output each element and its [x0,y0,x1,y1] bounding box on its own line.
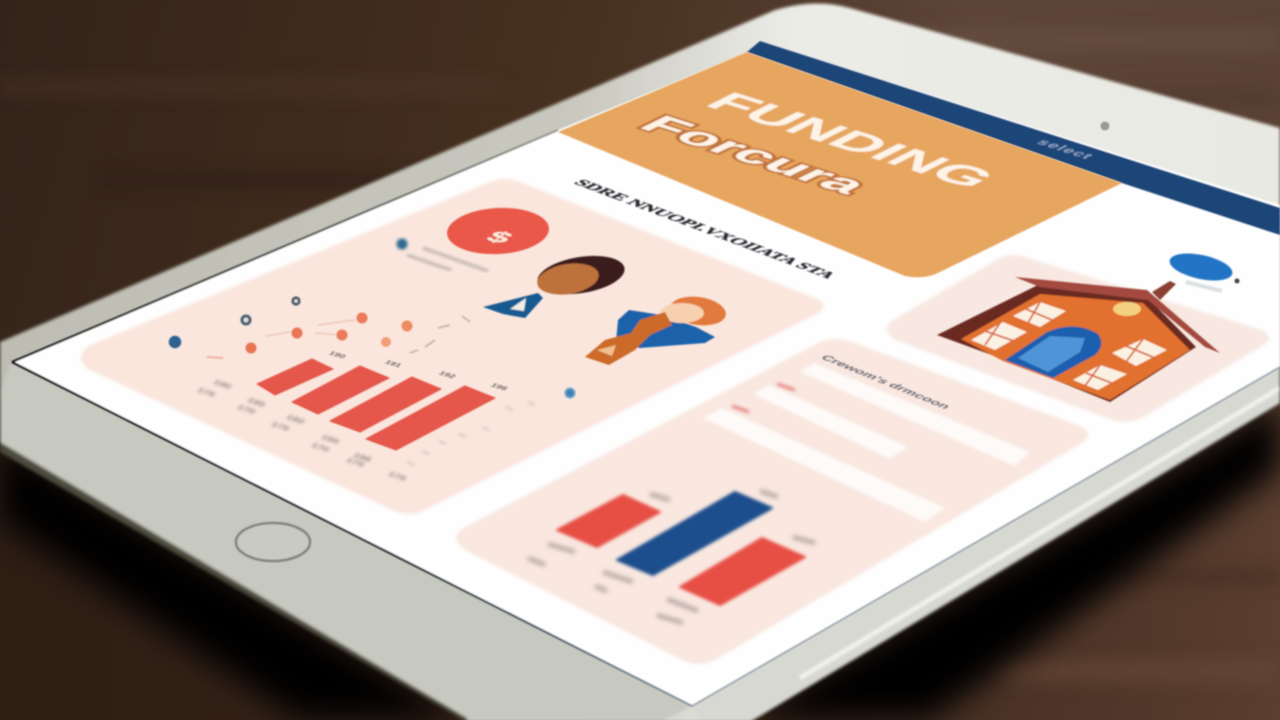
bar chart axis labels: 175 [344,457,367,468]
bar chart axis labels: 190 [211,379,234,390]
navy header bar [747,41,1280,235]
title: FUNDING: FUNDING [694,87,1008,193]
panel: main funding chart [81,179,824,514]
icon: house illustration [937,277,1220,402]
tablet shadow [0,400,1280,720]
bar chart axis labels: 195 [319,434,342,445]
bar chart value labels [327,350,511,392]
subtitle text: SDRE NNUOPI.VXOIIATA STA [570,178,841,280]
bar chart: red and navy bars [557,492,805,605]
callout caption [396,238,488,271]
bar chart [257,359,495,450]
bar chart value labels: 192 [437,370,459,380]
icon: person one [483,250,627,318]
progress bars [703,363,1030,522]
line chart [170,298,574,398]
windows [1013,302,1066,327]
bar chart value labels: 190 [327,350,349,360]
orange title banner [558,52,1122,277]
bar chart axis labels: 195 [245,397,268,408]
icon: dollar coin: $ [480,228,519,247]
title: Forcura: Forcura [629,111,881,199]
icon: person two [585,293,728,365]
bar labels [528,491,815,623]
panel: house [887,249,1269,422]
home button [236,523,310,561]
icon: dollar coin [446,205,550,257]
bar chart axis labels: 196 [351,452,374,463]
camera dot [1100,122,1110,130]
bar chart axis labels: 170 [309,442,332,453]
door [1005,326,1101,378]
bar chart value labels: 196 [489,382,511,392]
bar chart axis labels: 175 [269,421,292,432]
icon: blue cloud [1167,249,1240,291]
panel: lower right progress and bars [456,339,1088,664]
faint chart ticks [407,402,535,465]
bar chart axis labels: 170 [235,404,258,415]
bar chart axis labels: 175 [386,471,409,482]
bar chart value labels: 191 [383,359,405,369]
panel heading: Crewom's drmcoon [818,354,954,410]
bar chart axis labels: 190 [284,414,307,425]
header label: select [1033,138,1096,161]
bar chart axis labels: 175 [195,387,218,398]
bar chart axis labels [195,379,409,482]
